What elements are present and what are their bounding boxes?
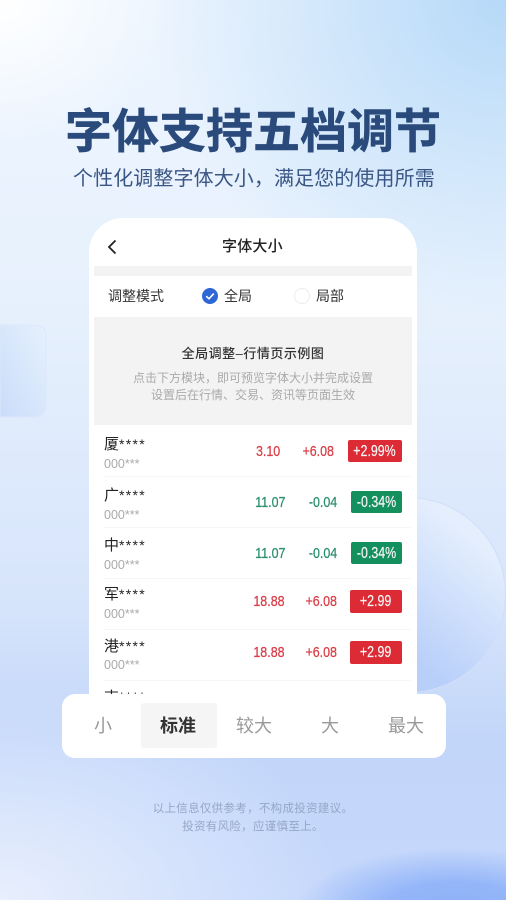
percent tag bbox=[348, 440, 402, 462]
explanation text bbox=[133, 371, 373, 402]
change: +6.08 bbox=[305, 593, 337, 610]
change: -0.04 bbox=[309, 494, 337, 511]
name: 港**** bbox=[104, 638, 146, 655]
percent tag bbox=[351, 542, 402, 564]
option: largest: 最大 bbox=[388, 716, 424, 736]
disclaimer bbox=[153, 802, 353, 832]
name: 厦**** bbox=[104, 436, 146, 453]
disclaimer: 以上信息仅供参考，不构成投资建议。 bbox=[153, 803, 353, 815]
mode label: 调整模式 bbox=[108, 288, 164, 304]
option: small: 小 bbox=[94, 716, 112, 736]
panel: font size selector bbox=[62, 694, 446, 758]
row: stock 5 bbox=[104, 638, 402, 672]
value tag bbox=[350, 590, 402, 613]
row: stock 3 bbox=[104, 537, 402, 572]
panel: explanation bbox=[94, 317, 412, 425]
name: 广**** bbox=[104, 487, 146, 504]
code: 000*** bbox=[104, 558, 139, 572]
icon: back arrow bbox=[108, 240, 116, 254]
panel: phone screen bbox=[89, 218, 417, 694]
divider band bbox=[94, 266, 412, 276]
title: 字体支持五档调节 bbox=[65, 105, 441, 158]
explanation text: 点击下方模块，即可预览字体大小并完成设置 bbox=[133, 371, 373, 385]
change: +6.08 bbox=[302, 443, 334, 460]
name: 中**** bbox=[104, 537, 146, 554]
row: stock 2 bbox=[104, 487, 402, 522]
value tag: +2.99 bbox=[360, 644, 392, 661]
option: larger: 较大 bbox=[236, 716, 272, 736]
price: 18.88 bbox=[254, 644, 285, 661]
selected option background bbox=[141, 703, 217, 748]
code: 000*** bbox=[104, 658, 139, 672]
price: 11.07 bbox=[255, 494, 285, 511]
change: +6.08 bbox=[305, 644, 337, 661]
option: large: 大 bbox=[321, 716, 339, 736]
option: partial: 局部 bbox=[316, 288, 344, 304]
price: 3.10 bbox=[256, 443, 280, 460]
percent tag: +2.99% bbox=[354, 443, 396, 460]
code: 000*** bbox=[104, 508, 139, 522]
row: stock 1 bbox=[104, 436, 402, 471]
option: standard: 标准 bbox=[160, 716, 196, 736]
explanation title: 全局调整–行情页示例图 bbox=[182, 346, 324, 361]
subtitle: 个性化调整字体大小，满足您的使用所需 bbox=[73, 168, 435, 190]
change: -0.04 bbox=[309, 545, 337, 562]
name: 军**** bbox=[104, 586, 146, 603]
row: stock 4 bbox=[104, 586, 402, 621]
code: 000*** bbox=[104, 607, 139, 621]
icon: unchecked radio bbox=[294, 288, 310, 304]
explanation text: 设置后在行情、交易、资讯等页面生效 bbox=[151, 388, 355, 402]
partially hidden row name: 吉**** bbox=[104, 689, 146, 706]
icon: checked radio bbox=[202, 288, 218, 304]
screen title: 字体大小 bbox=[222, 238, 283, 255]
percent tag bbox=[351, 491, 402, 513]
option: global: 全局 bbox=[224, 288, 252, 304]
disclaimer: 投资有风险，应谨慎至上。 bbox=[182, 820, 324, 832]
price: 11.07 bbox=[255, 545, 285, 562]
code: 000*** bbox=[104, 457, 139, 471]
value tag: +2.99 bbox=[360, 593, 392, 610]
percent tag: -0.34% bbox=[357, 545, 396, 562]
percent tag: -0.34% bbox=[357, 494, 396, 511]
price: 18.88 bbox=[254, 593, 285, 610]
value tag bbox=[350, 641, 402, 664]
